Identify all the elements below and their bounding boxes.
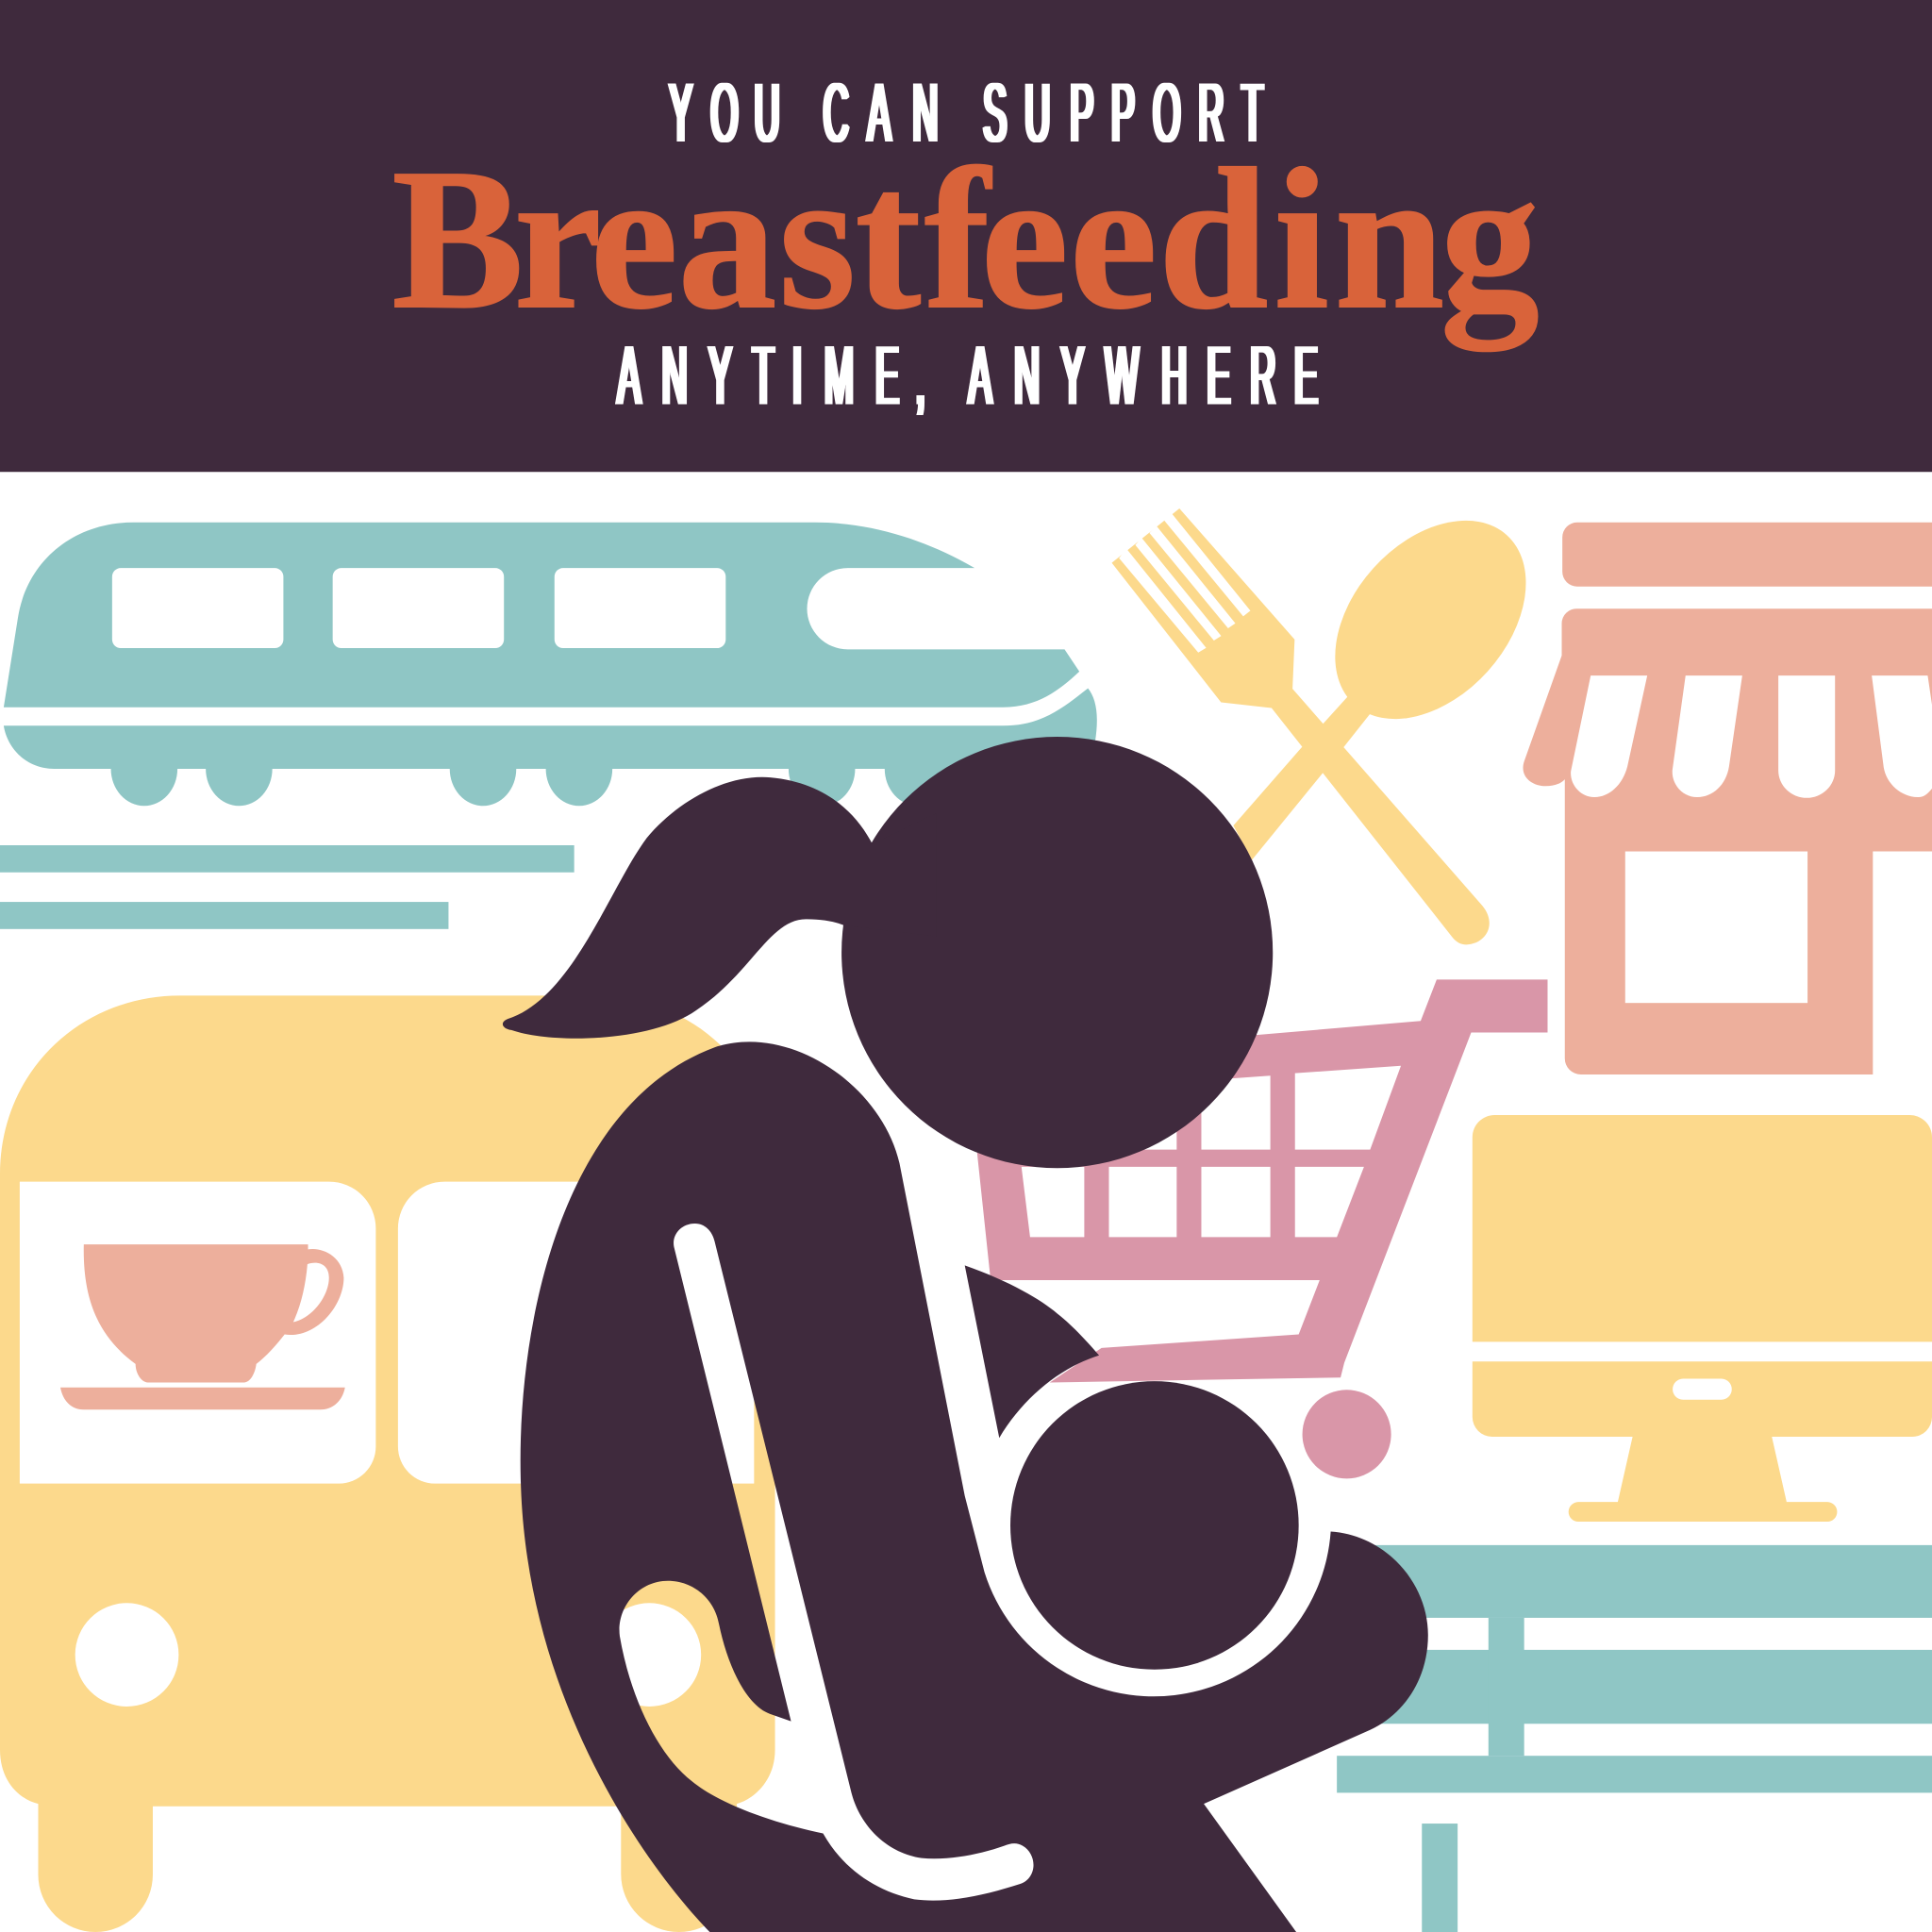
icon: storefront	[1524, 523, 1932, 1074]
header banner	[0, 0, 1932, 472]
store sign	[1562, 523, 1932, 587]
bus body	[0, 995, 775, 1932]
bus headlight left	[75, 1603, 178, 1707]
icon: fork and spoon	[1112, 484, 1564, 944]
mother head	[841, 737, 1273, 1168]
bus window right	[398, 1182, 754, 1484]
icon: coffee cup	[60, 1244, 345, 1409]
mother nursing baby silhouette	[503, 737, 1428, 1932]
monitor screen	[1473, 1115, 1932, 1341]
saucer	[60, 1388, 345, 1409]
icon: train	[4, 523, 1097, 806]
store awning openings	[1571, 675, 1932, 798]
title: Breastfeeding: Breastfeeding	[391, 126, 1540, 352]
icon: park bench	[1337, 1545, 1932, 1932]
train lower body	[4, 689, 1097, 769]
monitor chin and stand	[1473, 1361, 1932, 1522]
train wheels	[111, 769, 951, 806]
fork tine gaps	[1119, 513, 1250, 653]
cart grid cells	[1022, 1066, 1401, 1237]
ponytail	[503, 777, 937, 1039]
baby head	[1010, 1381, 1299, 1670]
icon: shopping cart	[967, 979, 1547, 1478]
icon: desktop monitor	[1473, 1115, 1932, 1522]
bus window left	[20, 1182, 375, 1484]
speed lines	[0, 845, 575, 929]
fork	[1112, 508, 1490, 944]
icon: bus	[0, 995, 775, 1932]
spoon	[1233, 484, 1564, 860]
cup handle opening	[293, 1263, 329, 1322]
mother body and arm	[521, 1041, 1428, 1932]
store body	[1524, 608, 1932, 1074]
mother breast	[965, 1265, 1099, 1438]
cup bowl	[84, 1244, 343, 1382]
train upper body	[4, 523, 1079, 708]
store window	[1625, 852, 1807, 1003]
cart wheel	[1303, 1390, 1391, 1478]
bus headlight right	[597, 1603, 701, 1707]
cart frame	[967, 979, 1547, 1382]
heading line: you can support: YOU CAN SUPPORT	[669, 67, 1263, 160]
heading line: anytime, anywhere: ANYTIME, ANYWHERE	[617, 329, 1318, 423]
